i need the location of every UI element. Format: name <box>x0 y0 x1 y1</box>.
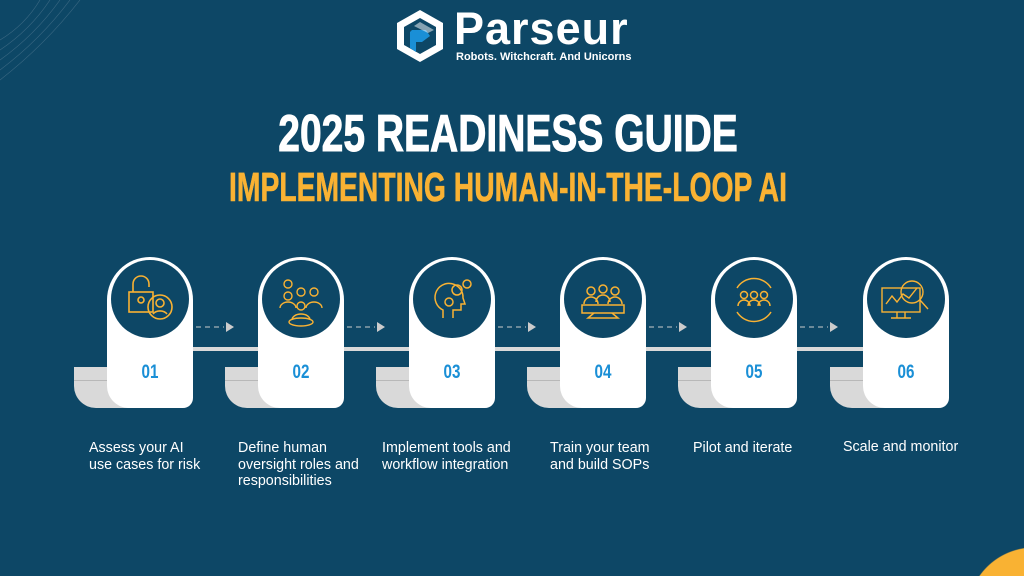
label 3 <box>382 440 511 472</box>
timeline line <box>190 347 870 351</box>
arrow 4 <box>649 322 687 332</box>
label 5: Pilot and iterate <box>693 440 792 456</box>
card 01 <box>74 257 193 408</box>
label 3: workflow integration <box>382 456 508 472</box>
step labels <box>89 440 200 472</box>
card 06: 06 <box>898 362 914 383</box>
tagline: Robots. Witchcraft. And Unicorns <box>456 51 632 63</box>
label 4 <box>550 440 650 472</box>
card 04 <box>527 257 646 408</box>
label 3: Implement tools and <box>382 440 511 456</box>
decorative orange corner <box>964 544 1024 576</box>
label 6: Scale and monitor <box>843 439 958 455</box>
card 06 <box>830 257 949 408</box>
label 2: responsibilities <box>238 473 332 489</box>
card 04: 04 <box>595 362 611 383</box>
label 4: and build SOPs <box>550 456 649 472</box>
step labels: Assess your AI <box>89 440 184 456</box>
label 2 <box>238 440 359 489</box>
decorative wave lines top-left <box>0 0 80 80</box>
card 03: 03 <box>444 362 460 383</box>
arrow 1 <box>196 322 234 332</box>
arrow 2 <box>347 322 385 332</box>
title: 2025 READINESS GUIDE <box>278 105 738 163</box>
step labels: use cases for risk <box>89 456 200 472</box>
label 4: Train your team <box>550 440 650 456</box>
label 2: Define human <box>238 440 327 456</box>
label 2: oversight roles and <box>238 456 359 472</box>
card 05: 05 <box>746 362 762 383</box>
arrow 5 <box>800 322 838 332</box>
card 01: 01 <box>142 362 158 383</box>
card 05 <box>678 257 797 408</box>
arrow 3 <box>498 322 536 332</box>
card 03 <box>376 257 495 408</box>
logo <box>397 3 632 63</box>
brand name: Parseur <box>454 3 629 54</box>
subtitle: IMPLEMENTING HUMAN-IN-THE-LOOP AI <box>229 164 787 210</box>
icon: parseur hex <box>397 10 443 62</box>
card 02: 02 <box>293 362 309 383</box>
card 02 <box>225 257 344 408</box>
